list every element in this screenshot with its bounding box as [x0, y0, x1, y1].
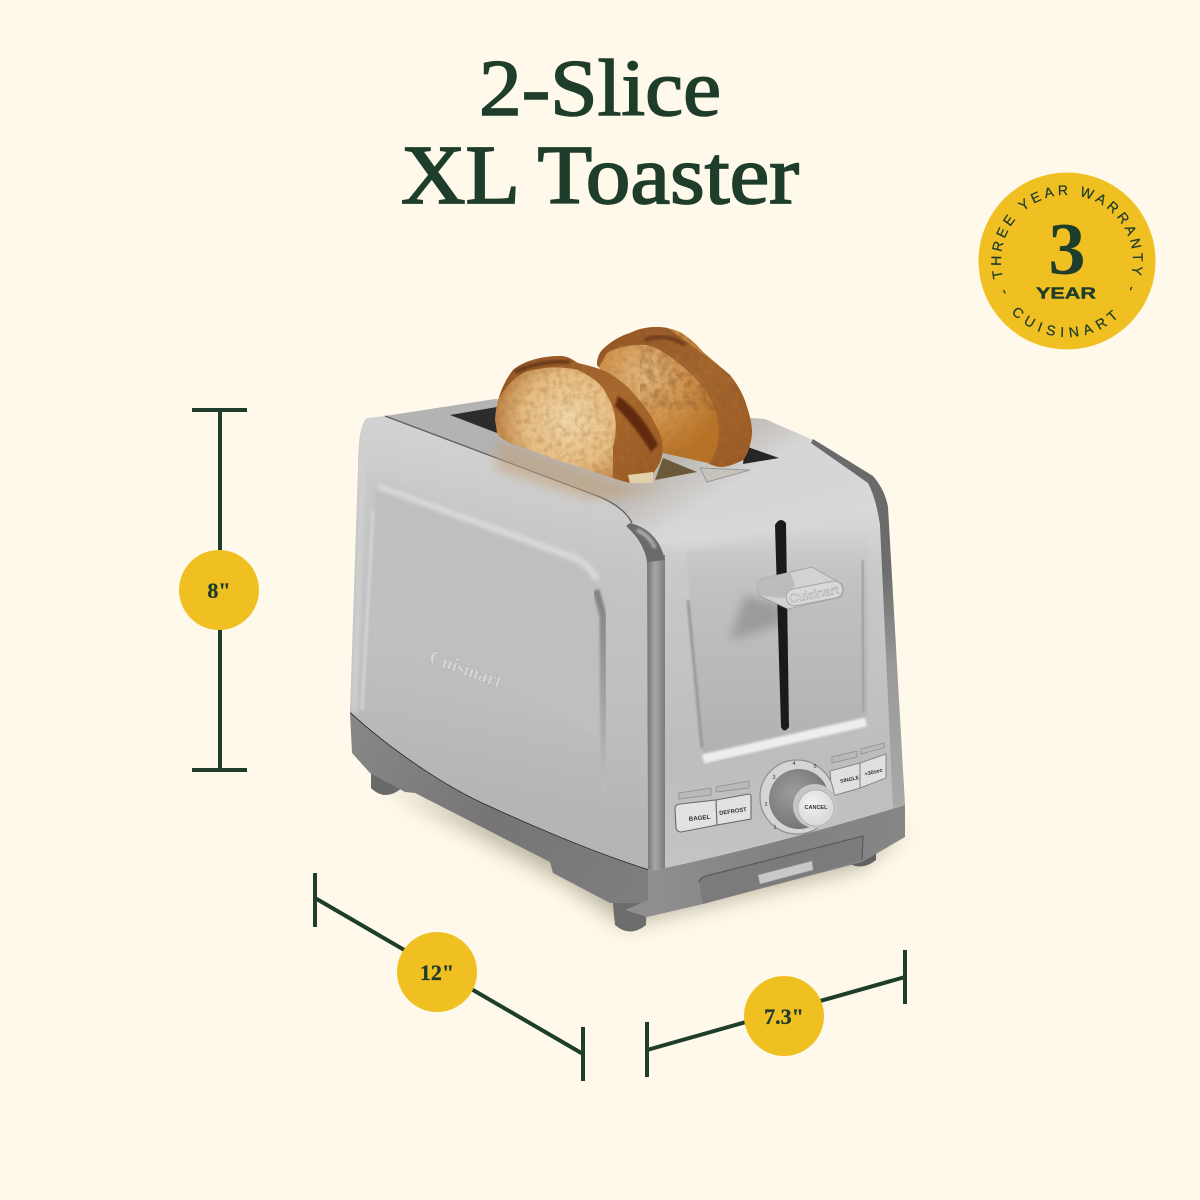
- warranty badge: [978, 172, 1156, 350]
- button: defrost: [716, 794, 751, 825]
- lever slot: [775, 520, 789, 730]
- front face: [650, 439, 905, 868]
- depth dimension: 12 in: [315, 873, 583, 1081]
- browning dial: 3: [772, 775, 776, 781]
- depth dimension: 12 in: 12": [420, 960, 454, 985]
- warranty badge: CUISINART: [1013, 308, 1116, 338]
- right trim: [811, 439, 905, 808]
- side logo: Cuisinart: [426, 646, 506, 693]
- title: [401, 45, 799, 222]
- toaster: [350, 318, 905, 932]
- title: XL Toaster: [401, 129, 799, 222]
- title: 2-Slice: [479, 45, 721, 133]
- button: bagel: [675, 800, 717, 832]
- toaster slots: [450, 407, 779, 480]
- lever handle: [757, 567, 844, 609]
- recessed panel: [686, 528, 869, 753]
- browning dial: 1: [773, 825, 777, 831]
- warranty badge: - THREE YEAR WARRANTY -: [991, 185, 1143, 294]
- toast reflection: [495, 440, 665, 500]
- button: single: SINGLE: [840, 775, 860, 785]
- warranty badge: YEAR: [1036, 286, 1097, 302]
- button: single: [830, 763, 860, 796]
- height dimension: 8 in: [179, 410, 259, 770]
- button: bagel: BAGEL: [688, 814, 711, 823]
- width dimension: 7.3 in: 7.3": [764, 1004, 804, 1029]
- lever shadow: [730, 595, 785, 640]
- shadow: [385, 785, 905, 925]
- width dimension: 7.3 in: [647, 950, 905, 1077]
- toaster feet: [371, 760, 876, 932]
- slot logo: [700, 468, 750, 482]
- grey base: side: [350, 713, 650, 903]
- crumb tray: [699, 836, 863, 904]
- browning dial: 4: [792, 761, 796, 767]
- back toast slice: [597, 327, 752, 467]
- browning dial: CANCEL: [805, 805, 828, 811]
- button: plus 30 seconds: [860, 754, 886, 788]
- top plate: [385, 399, 888, 565]
- button: plus 30 seconds: +30sec: [864, 768, 883, 778]
- button: defrost: DEFROST: [719, 807, 748, 817]
- lever handle: Cuisinart: [788, 583, 840, 606]
- browning dial: 2: [764, 802, 768, 808]
- side panel: [350, 416, 648, 870]
- front toast slice: [495, 356, 662, 483]
- browning dial: 5: [813, 764, 817, 770]
- indicator lights: [679, 743, 884, 799]
- height dimension: 8 in: 8": [207, 578, 231, 603]
- browning dial: [760, 760, 837, 834]
- warranty badge: 3: [1048, 209, 1086, 291]
- chrome corner trim: [626, 523, 665, 870]
- grey base: front: [625, 805, 905, 917]
